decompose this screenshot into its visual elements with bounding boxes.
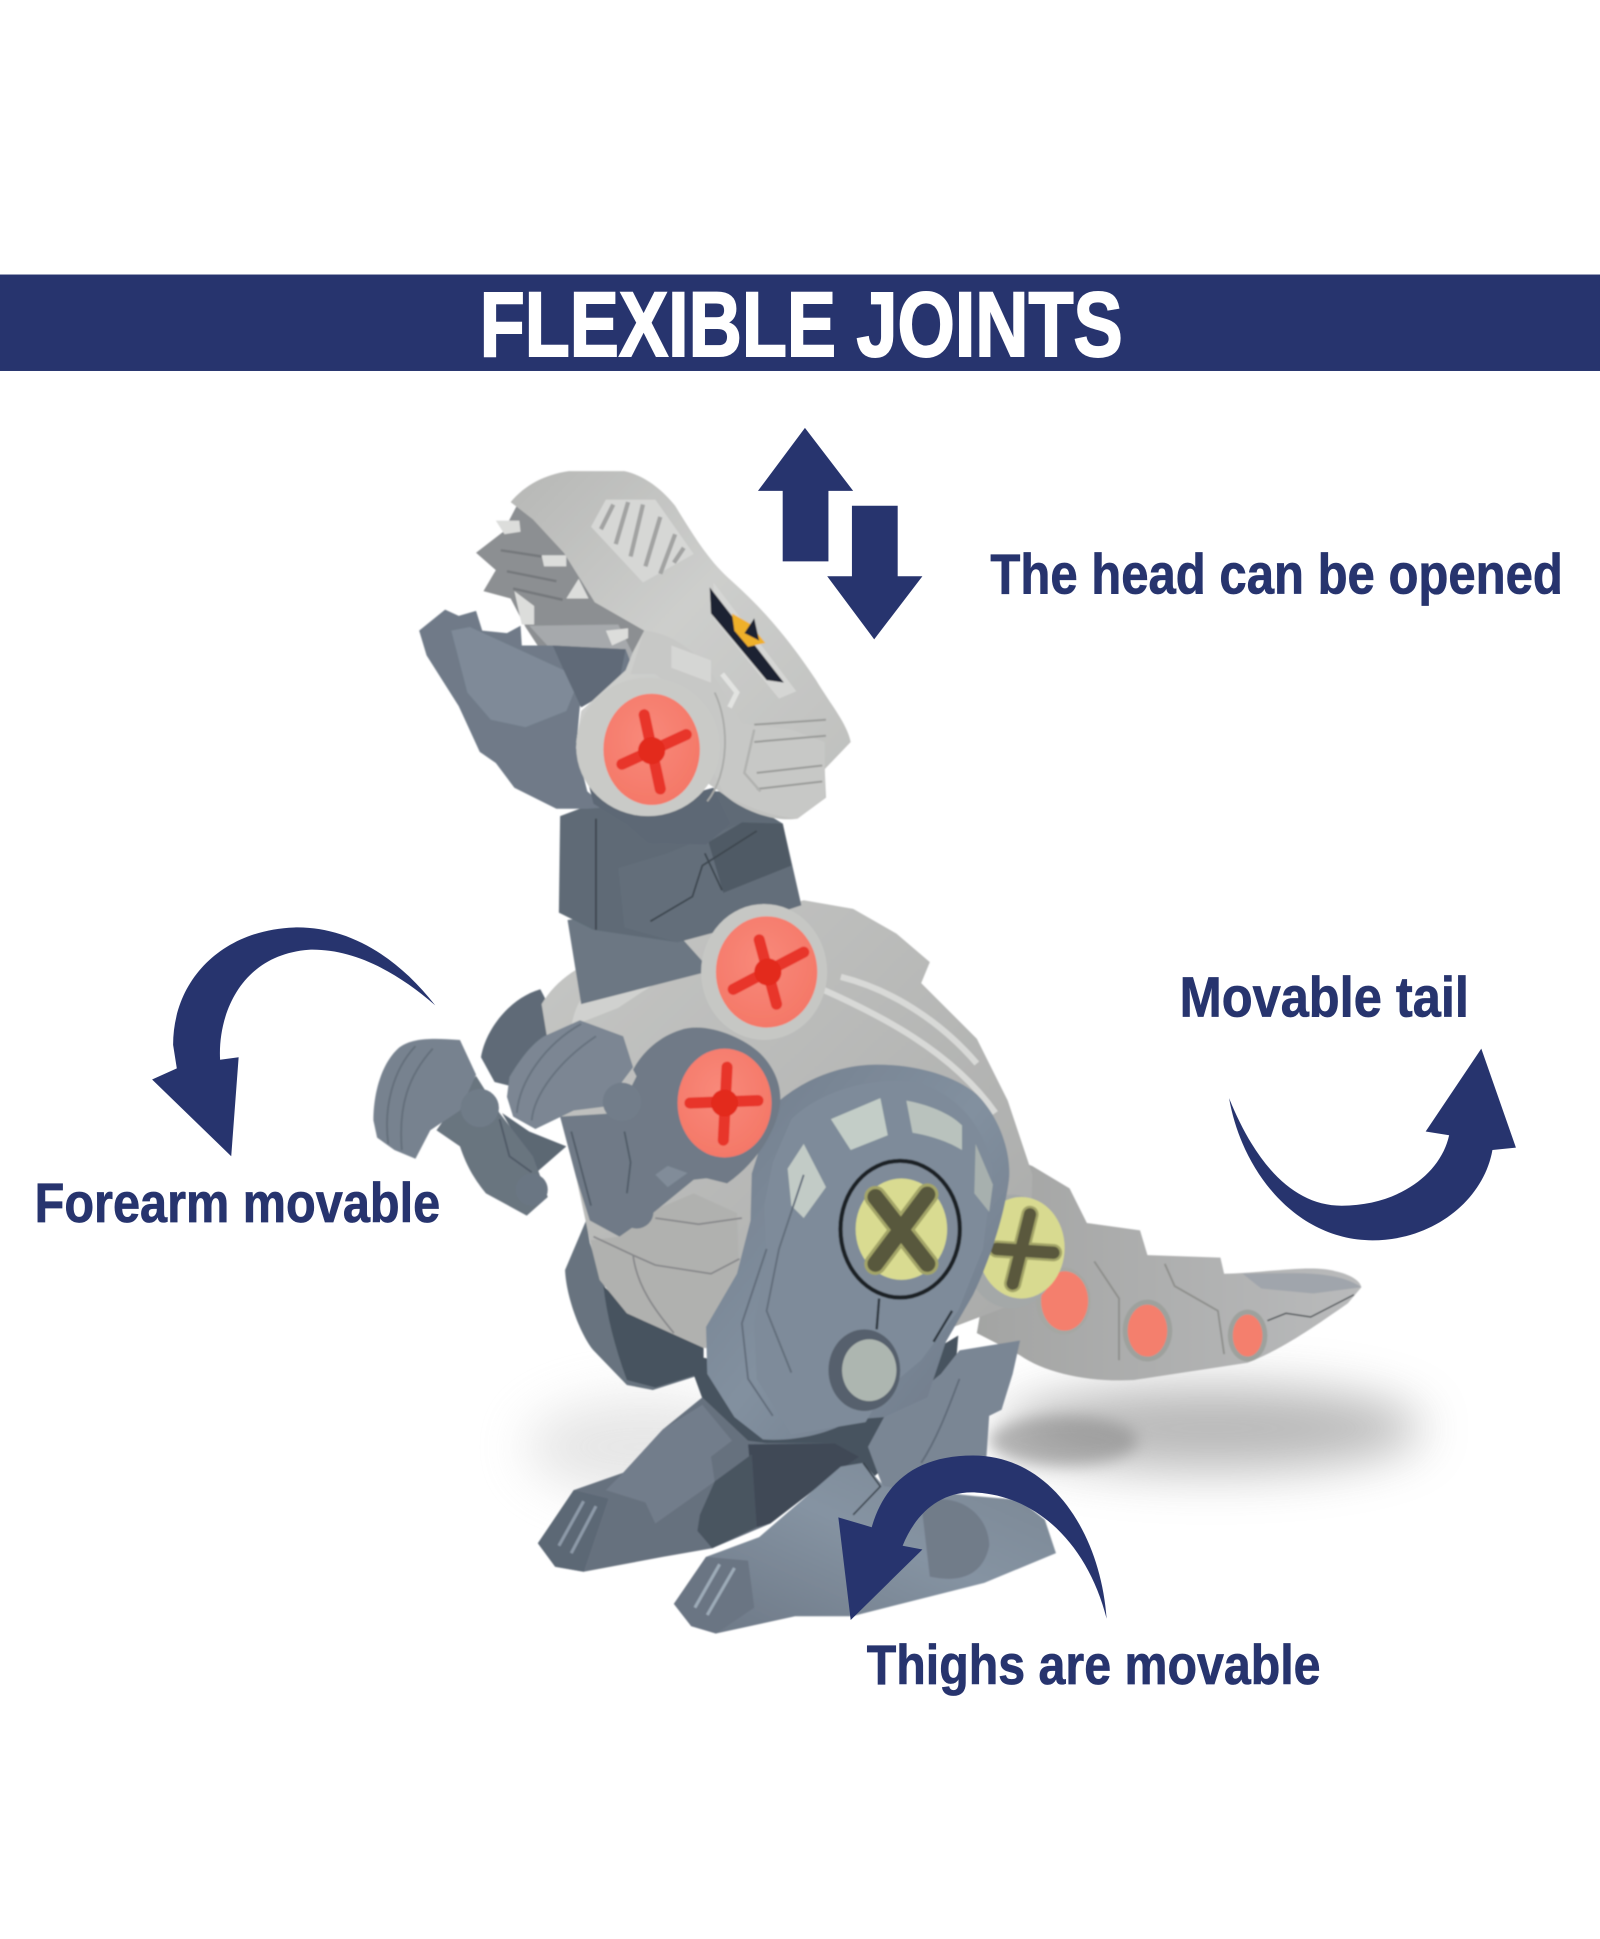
- arrow: tail: [1229, 1049, 1516, 1240]
- arrow: thighs: [838, 1455, 1107, 1620]
- rear green screw: [964, 1195, 1065, 1308]
- head shell: [511, 471, 851, 819]
- near forearm: [560, 1063, 742, 1237]
- far forearm claw: [373, 1039, 548, 1216]
- vent stripes: [591, 500, 694, 582]
- near forearm claw: [507, 1020, 653, 1229]
- title banner: FLEXIBLE JOINTS: [480, 274, 1123, 376]
- arrow: head opens up: [758, 428, 853, 561]
- shoulder red screw: [633, 1028, 780, 1183]
- dinosaur toy: [373, 471, 1361, 1634]
- head red screw: [576, 678, 725, 816]
- floor shadow: [526, 1386, 1422, 1496]
- upper mouth and teeth: [476, 501, 649, 668]
- label: forearm: Forearm movable: [35, 1172, 440, 1234]
- arrow: forearm: [152, 927, 435, 1156]
- hip filler between legs: [686, 1336, 958, 1484]
- lower jaw: [419, 610, 731, 845]
- label: tail: Movable tail: [1180, 966, 1469, 1029]
- front thigh: [868, 1340, 1020, 1490]
- dinosaur tail: [977, 1156, 1361, 1380]
- small pale button: [828, 1329, 900, 1411]
- pelvis plate: [706, 1065, 1009, 1440]
- torso: [542, 900, 1032, 1360]
- chest red screw: [701, 904, 827, 1040]
- front foot: [674, 1463, 1056, 1634]
- label: thighs: Thighs are movable: [867, 1634, 1321, 1696]
- main green screw: [838, 1159, 962, 1300]
- eye slit: [710, 587, 784, 683]
- neck: [559, 791, 801, 1004]
- far leg: [565, 1221, 704, 1390]
- arrow: head opens down: [827, 506, 922, 639]
- far foot: [538, 1397, 859, 1572]
- title banner: [0, 274, 1600, 376]
- far shoulder and inner arm: [481, 989, 566, 1172]
